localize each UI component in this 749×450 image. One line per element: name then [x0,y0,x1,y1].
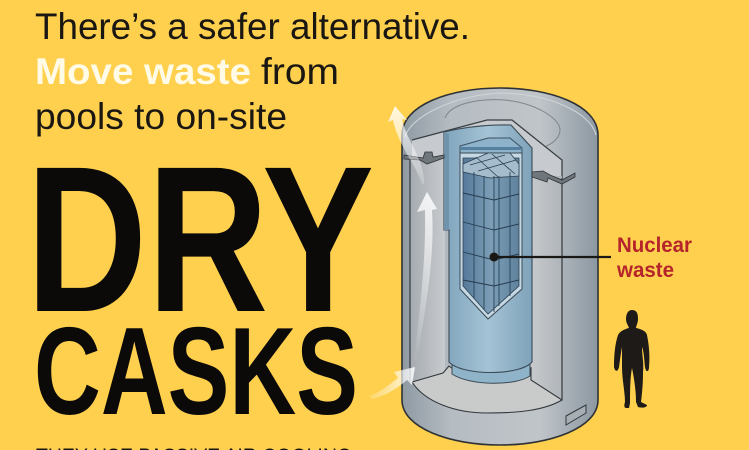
lid seal right [532,171,575,184]
canister base ledge [452,362,530,383]
title: CASKS: CASKS [34,303,358,441]
air flow arrow: top exit [388,106,424,184]
fuel basket shell [460,153,522,319]
cut-away lid section [412,120,562,230]
fuel columns [474,172,510,312]
canister inner opening [460,138,522,200]
headline text: from [261,51,339,92]
bottom vent [566,405,586,425]
lid seal left [404,152,444,164]
fuel rods block [463,158,519,314]
label: nuclear waste [616,234,692,282]
air flow arrow: intake [369,367,415,399]
canister collar [444,132,449,230]
dry cask illustration [402,88,598,445]
cask outer body [402,88,598,445]
fuel grid top [463,153,519,178]
floor [412,366,562,413]
inner right wall [531,176,562,398]
air flow arrow: rising [414,192,437,360]
label: nuclear waste: waste [616,259,674,282]
label: nuclear waste: Nuclear [617,234,692,257]
icon: human silhouette [614,310,649,408]
headline text: pools to on-site [35,96,287,137]
leader line [490,252,611,262]
blue canister [444,125,532,372]
headline text: Move waste [35,51,251,92]
dome rings [445,100,560,146]
headline text: There’s a safer alternative. [35,6,470,47]
headline text [35,6,470,137]
title: DRY: DRY [26,124,374,356]
inner left wall [410,158,445,382]
